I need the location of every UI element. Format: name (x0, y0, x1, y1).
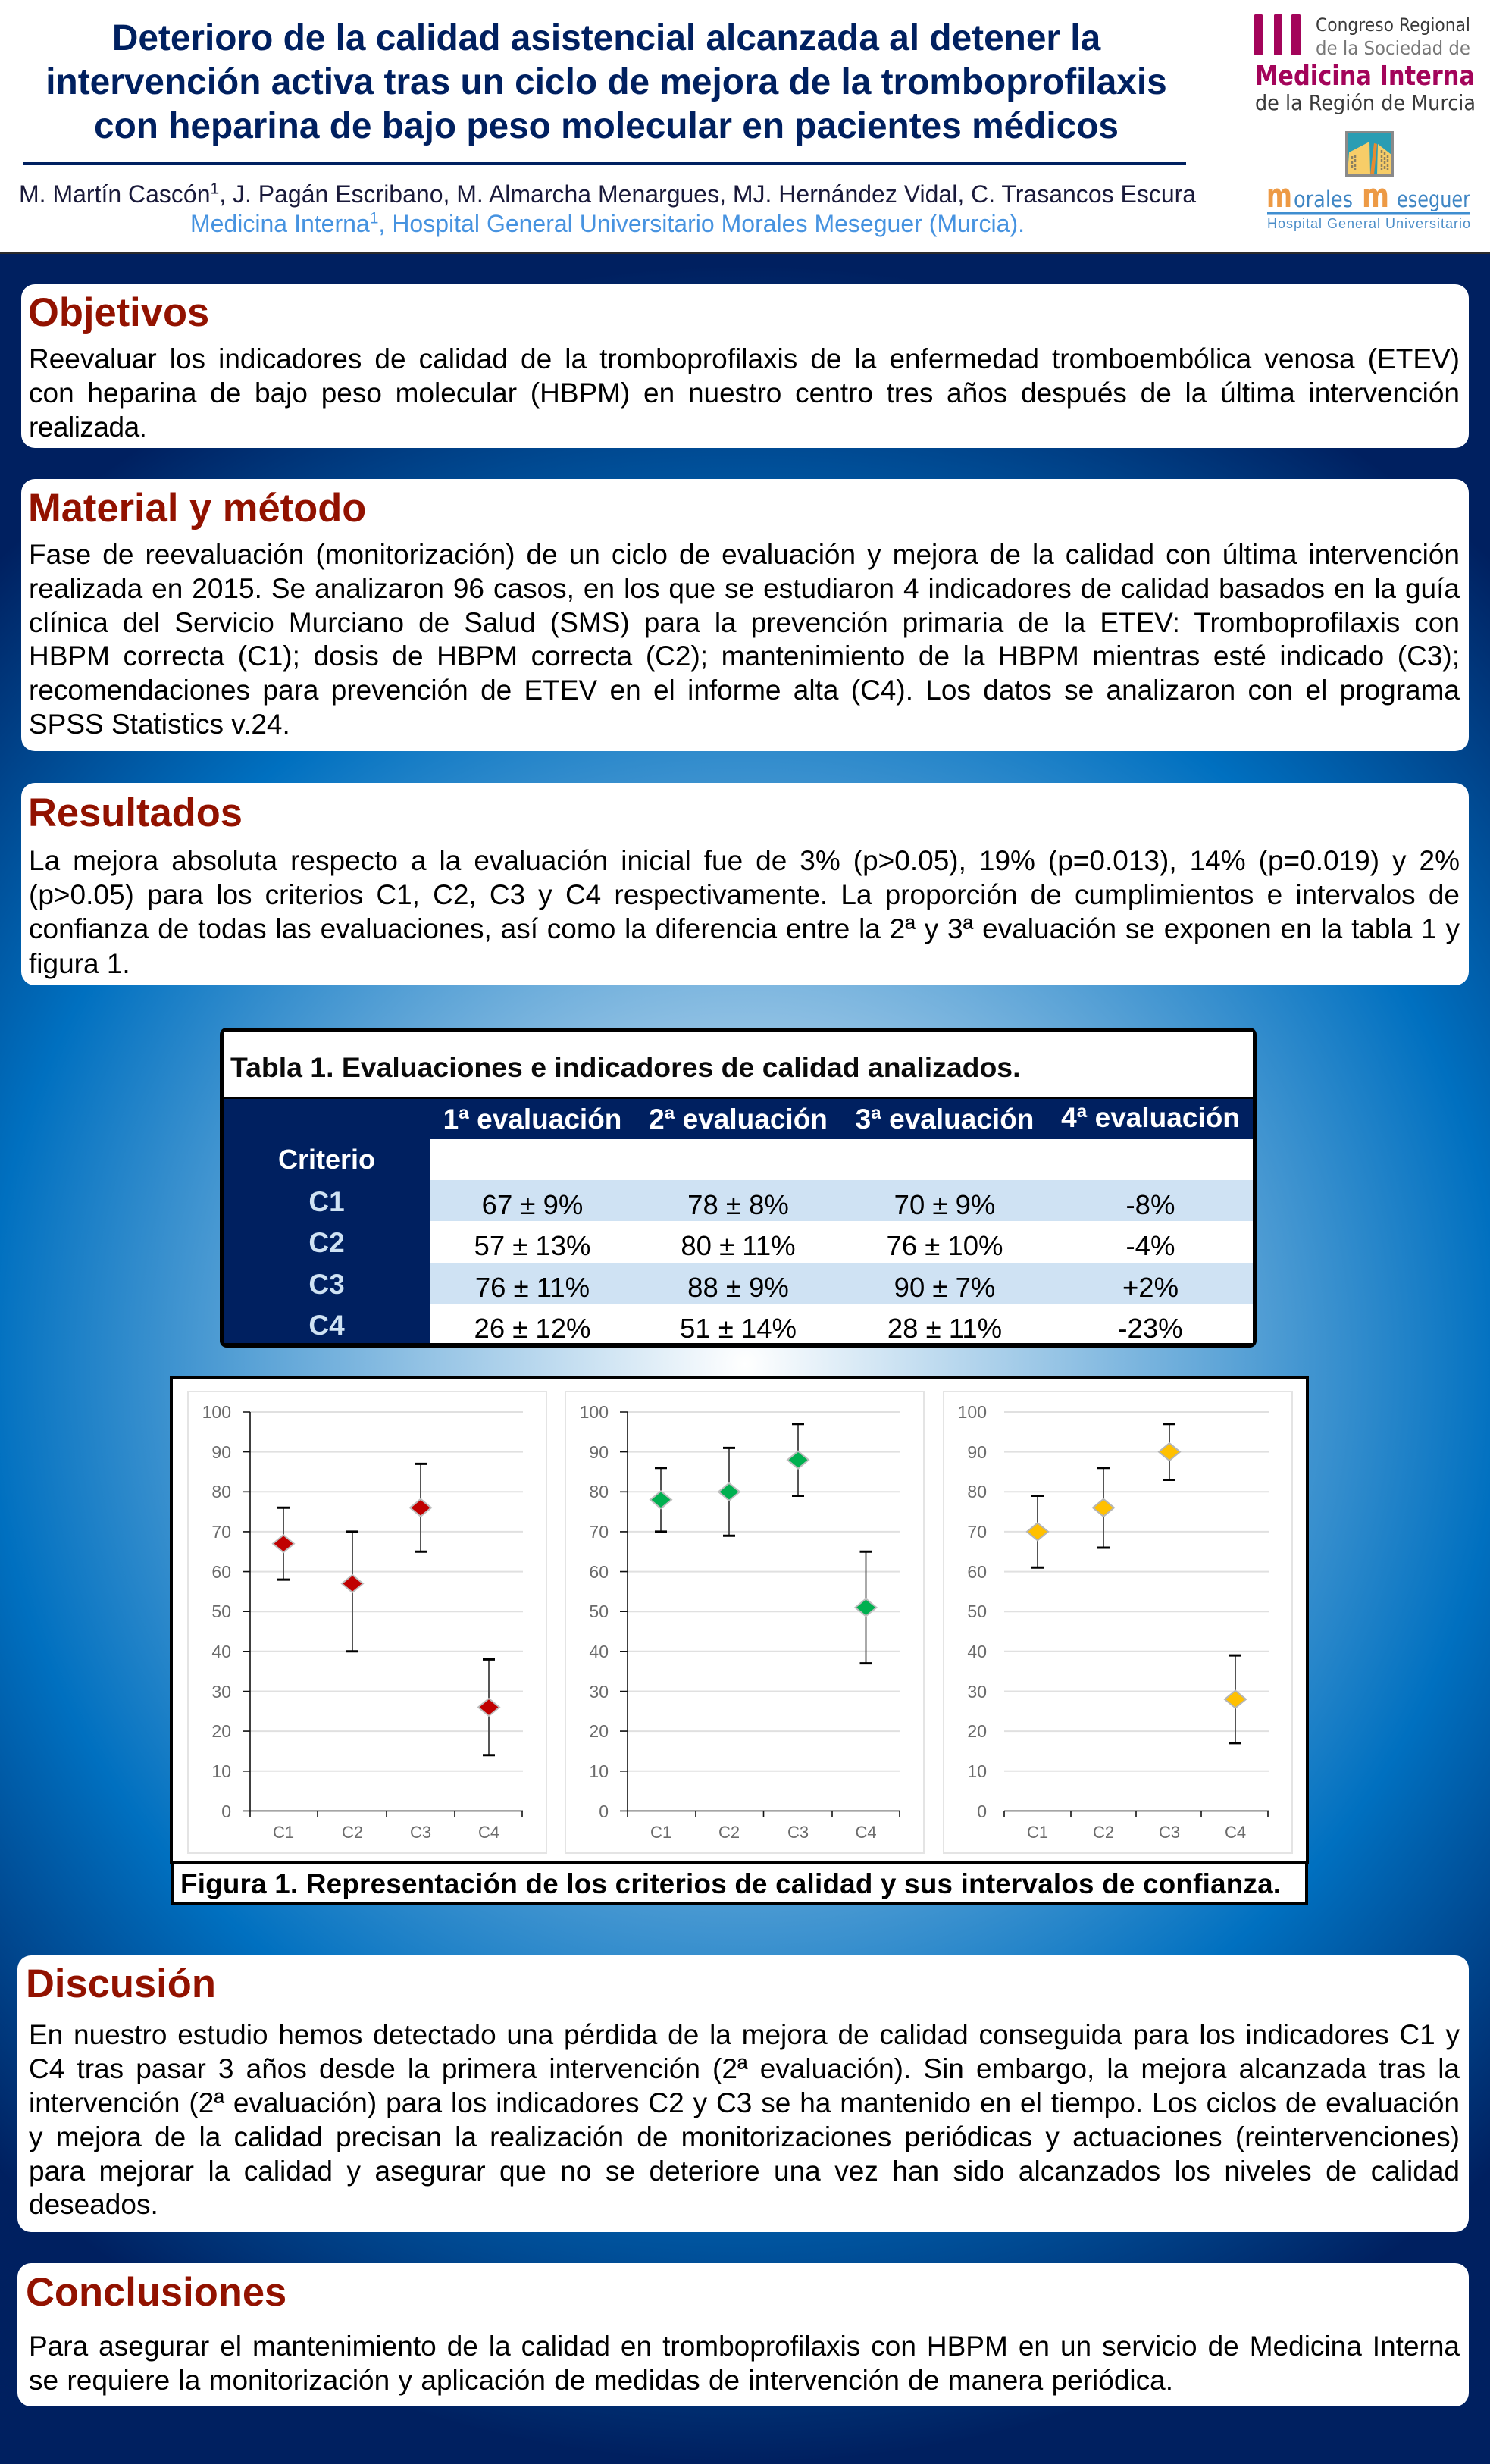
table of evaluations: 78 ± 8% (687, 1189, 789, 1220)
table of evaluations: C3 (308, 1269, 345, 1300)
affiliation: Medicina Interna1, Hospital General Universitario Morales Meseguer (Murcia). (190, 209, 1025, 237)
table of evaluations: 51 ± 14% (680, 1313, 797, 1344)
title (45, 18, 1167, 146)
chart: tercera evaluacion: C1 (1027, 1823, 1048, 1842)
chart: primera evaluacion: 100 (202, 1402, 231, 1422)
panel: resultados (21, 783, 1469, 985)
table of evaluations: -4% (1126, 1229, 1175, 1261)
chart: primera evaluacion: C4 (478, 1823, 499, 1842)
logo: hospital building icon (1345, 131, 1394, 177)
heading: material y metodo: Material y método (28, 486, 366, 531)
text: resultados: figura 1. (29, 948, 130, 979)
data point C3 (1159, 1424, 1180, 1479)
text: discusion (29, 2019, 1460, 2220)
text: conclusiones: se requiere la monitorización y aplicación de medidas de intervención de manera periódica. (29, 2365, 1173, 2396)
logo: morales meseguer (1266, 182, 1470, 231)
text: material y metodo: SPSS Statistics v.24. (29, 709, 290, 740)
chart: segunda evaluacion: 100 (580, 1402, 609, 1422)
text: resultados: confianza de todas las evaluaciones, así como la diferencia entre la 2ª y 3ª evaluación se exponen en la tabla 1 y (29, 913, 1460, 944)
chart: primera evaluacion: 40 (211, 1642, 231, 1661)
table of evaluations: 1ª evaluación (443, 1104, 621, 1134)
text: conclusiones: Para asegurar el mantenimiento de la calidad en tromboprofilaxis con HBPM en un servicio de Medicina Interna (29, 2331, 1460, 2362)
authors: M. Martín Cascón1, J. Pagán Escribano, M. Almarcha Menargues, MJ. Hernández Vidal, C. Trasancos Escura (19, 180, 1196, 208)
chart: primera evaluacion: C2 (342, 1823, 363, 1842)
chart: segunda evaluacion: 40 (589, 1642, 609, 1661)
table of evaluations: 90 ± 7% (894, 1272, 995, 1303)
text: objetivos (29, 343, 1460, 443)
table of evaluations: 88 ± 9% (687, 1272, 789, 1303)
text: material y metodo: recomendaciones para prevención de ETEV en el informe alta (C4). Los datos se analizaron con el programa (29, 675, 1460, 706)
table of evaluations: Criterio (278, 1144, 375, 1175)
title: intervención activa tras un ciclo de mejora de la tromboprofilaxis (45, 62, 1167, 102)
table title (224, 1032, 1253, 1097)
logo: congreso regional (1254, 14, 1476, 115)
logo: congreso regional: Congreso Regional (1316, 14, 1470, 36)
chart: primera evaluacion: 10 (211, 1761, 231, 1781)
data point C2 (718, 1448, 740, 1536)
chart: segunda evaluacion: 60 (589, 1562, 609, 1582)
table of evaluations: 67 ± 9% (482, 1189, 583, 1220)
text: material y metodo (29, 539, 1460, 740)
table of evaluations (224, 1099, 1253, 1344)
text: discusion: intervención (2ª evaluación) para los indicadores C2 y C3 se ha mantenido en el tiempo. Los ciclos de evaluación (29, 2087, 1460, 2118)
data point C2 (342, 1532, 363, 1652)
table panel (220, 1028, 1257, 1348)
chart: segunda evaluacion: 90 (589, 1442, 609, 1462)
chart: tercera evaluacion: 50 (967, 1601, 987, 1621)
text: material y metodo: realizada en 2015. Se analizaron 96 casos, en los que se estudiaron 4 indicadores de calidad basados en la guía (29, 573, 1460, 604)
panel: objetivos (21, 284, 1469, 448)
text: resultados: (p>0.05) para los criterios C1, C2, C3 y C4 respectivamente. La proporción de cumplimientos e intervalos de (29, 879, 1460, 910)
chart: segunda evaluacion: 0 (599, 1802, 609, 1821)
table of evaluations: 80 ± 11% (681, 1229, 796, 1261)
text: objetivos: realizada. (29, 412, 146, 443)
data point C4 (478, 1659, 499, 1755)
data point C1 (650, 1468, 671, 1532)
chart: segunda evaluacion: C4 (855, 1823, 877, 1842)
chart: tercera evaluacion: 80 (967, 1482, 987, 1501)
header band (0, 0, 1490, 254)
text: material y metodo: clínica del Servicio Murciano de Salud (SMS) para la prevención primaria de la ETEV: Tromboprofilaxis con (29, 607, 1460, 638)
data point C1 (273, 1508, 294, 1580)
heading: resultados: Resultados (28, 791, 243, 835)
text: discusion: y mejora de la calidad precisan la realización de monitorizaciones periódicas y actuaciones (reintervenciones) (29, 2121, 1460, 2152)
chart: tercera evaluacion: 60 (967, 1562, 987, 1582)
panel: conclusiones (17, 2263, 1469, 2406)
title: Deterioro de la calidad asistencial alcanzada al detener la (112, 18, 1100, 58)
table of evaluations: 28 ± 11% (887, 1313, 1002, 1344)
table of evaluations: -23% (1118, 1313, 1183, 1344)
table of evaluations: 76 ± 10% (887, 1229, 1003, 1261)
data point C2 (1093, 1468, 1114, 1548)
chart: primera evaluacion: 30 (211, 1682, 231, 1702)
text: material y metodo: HBPM correcta (C1); dosis de HBPM correcta (C2); mantenimiento de la HBPM mientras esté indicado (C3); (29, 640, 1460, 672)
text: resultados: La mejora absoluta respecto a la evaluación inicial fue de 3% (p>0.05), 19% (p=0.013), 14% (p=0.019) y 2% (29, 845, 1460, 876)
table of evaluations: C2 (308, 1226, 345, 1258)
table of evaluations: 76 ± 11% (475, 1272, 590, 1303)
chart: primera evaluacion: 60 (211, 1562, 231, 1582)
chart: segunda evaluacion: 20 (589, 1721, 609, 1741)
chart: primera evaluacion: 20 (211, 1721, 231, 1741)
figure caption: Figura 1. Representación de los criterios de calidad y sus intervalos de confianza. (180, 1868, 1281, 1899)
chart: primera evaluacion (188, 1392, 546, 1853)
table of evaluations: C4 (308, 1310, 345, 1341)
text: discusion: En nuestro estudio hemos detectado una pérdida de la mejora de calidad conseguida para los indicadores C1 y (29, 2019, 1460, 2050)
data point C4 (855, 1551, 876, 1664)
chart: primera evaluacion: 80 (211, 1482, 231, 1501)
chart: segunda evaluacion: 80 (589, 1482, 609, 1501)
logo: morales meseguer: orales (1294, 186, 1353, 212)
data point C4 (1225, 1655, 1246, 1743)
chart: primera evaluacion: 0 (221, 1802, 231, 1821)
chart: tercera evaluacion: C4 (1225, 1823, 1246, 1842)
chart: tercera evaluacion: C3 (1159, 1823, 1180, 1842)
table of evaluations: 2ª evaluación (649, 1104, 828, 1134)
panel: discusion (17, 1955, 1469, 2232)
heading: objetivos: Objetivos (28, 290, 209, 335)
table of evaluations: 3ª evaluación (856, 1104, 1034, 1134)
data point C1 (1027, 1496, 1048, 1567)
chart: tercera evaluacion: 0 (977, 1802, 987, 1821)
data point C3 (410, 1464, 431, 1551)
panel: material y metodo (21, 479, 1469, 751)
heading: conclusiones: Conclusiones (26, 2270, 286, 2315)
table of evaluations: 26 ± 12% (474, 1313, 590, 1344)
chart: tercera evaluacion: 90 (967, 1442, 987, 1462)
table of evaluations: 70 ± 9% (894, 1189, 995, 1220)
text: conclusiones (29, 2331, 1460, 2396)
chart: segunda evaluacion (565, 1392, 924, 1853)
title rule (23, 162, 1186, 165)
chart: segunda evaluacion: 10 (589, 1761, 609, 1781)
chart: primera evaluacion: C1 (273, 1823, 294, 1842)
text: material y metodo: Fase de reevaluación (monitorización) de un ciclo de evaluación y mejora de la calidad con última intervención (29, 539, 1460, 570)
chart: primera evaluacion: C3 (410, 1823, 431, 1842)
chart: tercera evaluacion: 100 (958, 1402, 987, 1422)
table of evaluations: C1 (308, 1186, 345, 1217)
table of evaluations: 4ª evaluación (1061, 1102, 1240, 1132)
chart: segunda evaluacion: 30 (589, 1682, 609, 1702)
chart: tercera evaluacion: 30 (967, 1682, 987, 1702)
title: con heparina de bajo peso molecular en pacientes médicos (94, 106, 1119, 146)
figure panel (170, 1376, 1309, 1905)
chart: segunda evaluacion: C2 (718, 1823, 740, 1842)
chart: segunda evaluacion: C3 (787, 1823, 809, 1842)
text: objetivos: con heparina de bajo peso molecular (HBPM) en nuestro centro tres años después de la última intervención (29, 377, 1460, 409)
text: resultados (29, 845, 1460, 979)
text: objetivos: Reevaluar los indicadores de calidad de la tromboprofilaxis de la enfermedad tromboembólica venosa (ETEV) (29, 343, 1460, 374)
logo: morales meseguer: Hospital General Universitario (1267, 216, 1470, 231)
chart: tercera evaluacion: 40 (967, 1642, 987, 1661)
chart: tercera evaluacion: C2 (1093, 1823, 1114, 1842)
table title: Tabla 1. Evaluaciones e indicadores de calidad analizados. (230, 1051, 1020, 1083)
text: discusion: C4 tras pasar 3 años desde la primera intervención (2ª evaluación). Sin embargo, la mejora alcanzada tras la (29, 2053, 1460, 2084)
chart: segunda evaluacion: 50 (589, 1601, 609, 1621)
chart: tercera evaluacion: 10 (967, 1761, 987, 1781)
chart: primera evaluacion: 90 (211, 1442, 231, 1462)
chart: primera evaluacion: 70 (211, 1522, 231, 1542)
chart: segunda evaluacion: 70 (589, 1522, 609, 1542)
chart: tercera evaluacion: 20 (967, 1721, 987, 1741)
text: discusion: deseados. (29, 2189, 158, 2220)
chart: segunda evaluacion: C1 (650, 1823, 671, 1842)
text: discusion: para mejorar la calidad y asegurar que no se deteriore una vez han sido alcanzados los niveles de calidad (29, 2156, 1460, 2187)
chart: tercera evaluacion (944, 1392, 1292, 1853)
table of evaluations: +2% (1122, 1272, 1179, 1303)
heading: discusion: Discusión (26, 1961, 216, 2006)
data point C3 (787, 1424, 809, 1496)
chart: tercera evaluacion: 70 (967, 1522, 987, 1542)
table of evaluations: 57 ± 13% (474, 1229, 590, 1261)
chart: primera evaluacion: 50 (211, 1601, 231, 1621)
table of evaluations: -8% (1126, 1189, 1175, 1220)
logo: congreso regional: de la Sociedad de (1316, 37, 1470, 59)
